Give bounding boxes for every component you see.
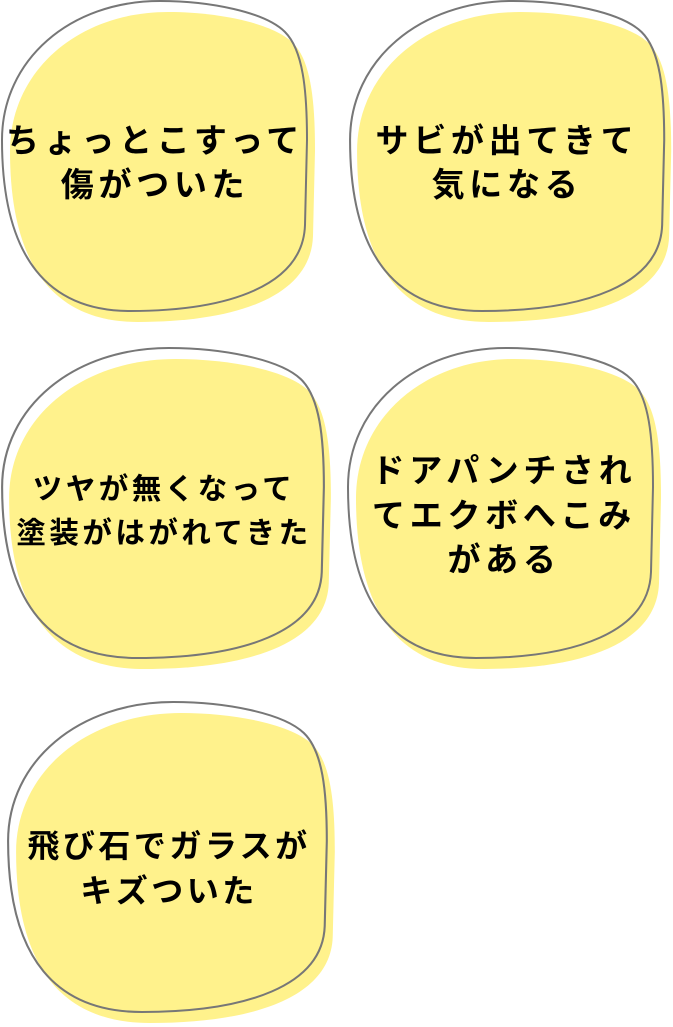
heading: rust text: サビが出てきて [376, 122, 638, 159]
heading: rust text [376, 122, 638, 203]
heading: stone chip text: 飛び石でガラスが [27, 828, 311, 864]
heading: scratch text [6, 122, 304, 203]
heading: door dent text: がある [447, 541, 561, 578]
heading: scratch text: ちょっとこすって [6, 122, 304, 159]
blob outline [2, 348, 324, 658]
panel: stone chip card [8, 702, 335, 1023]
heading: scratch text: 傷がついた [61, 166, 249, 203]
heading: paint text: ツヤが無くなって [33, 472, 295, 506]
heading: door dent text: てエクボへこみ [372, 497, 636, 534]
yellow blob [9, 359, 331, 669]
heading: door dent text [372, 452, 636, 578]
panel: door dent card [348, 348, 661, 669]
heading: paint text: 塗装がはがれてきた [16, 516, 312, 550]
blob outline [2, 1, 307, 311]
yellow blob [16, 713, 335, 1023]
heading: door dent text: ドアパンチされ [372, 452, 636, 489]
panel: scratch card [2, 1, 315, 322]
heading: rust text: 気になる [432, 166, 582, 203]
yellow blob [357, 12, 671, 322]
yellow blob [356, 359, 661, 669]
yellow blob [10, 12, 315, 322]
heading: stone chip text: キズついた [80, 873, 258, 909]
heading: stone chip text [27, 828, 311, 909]
heading: paint text [16, 472, 312, 550]
panel: rust card [350, 1, 671, 322]
panel: paint card [2, 348, 331, 669]
blob outline [348, 348, 653, 658]
blob outline [8, 702, 327, 1012]
blob outline [350, 1, 664, 311]
